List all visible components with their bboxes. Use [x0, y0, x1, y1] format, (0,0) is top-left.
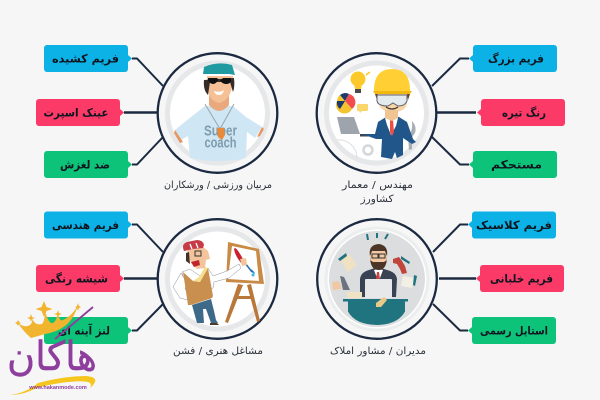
connectors: artist — [124, 224, 163, 330]
caption: engineers — [341, 180, 413, 205]
label: sport glasses — [36, 99, 124, 126]
circle: artist — [158, 219, 277, 339]
circle: manager — [317, 219, 437, 339]
label: mirrored lens: لنز آینه ای — [58, 324, 110, 338]
label: dark colour: رنگ تیره — [502, 106, 546, 120]
icon: coach figure: Super — [204, 122, 237, 140]
caption: engineers: کشاورز — [359, 194, 394, 205]
icon: crown — [18, 305, 78, 338]
caption: engineers: مهندس / معمار — [341, 180, 413, 191]
label: geometric frame — [44, 212, 132, 238]
label: coloured lens: شیشه رنگی — [45, 272, 108, 286]
icon: crown sparkles — [15, 301, 81, 326]
website address: www.hakanmode.com — [28, 385, 87, 391]
label: sturdy: مستحکم — [491, 158, 542, 172]
label: anti-slip — [44, 151, 132, 178]
panel: artist — [36, 212, 277, 357]
label: formal style — [468, 317, 556, 344]
label: classic frame: فریم کلاسیک — [476, 218, 552, 232]
icon: artist figure — [173, 240, 264, 325]
label: big frame: فریم بزرگ — [488, 52, 544, 66]
label: stretched frame: فریم کشیده — [52, 52, 119, 66]
circle: coach — [158, 53, 277, 173]
panel: manager — [317, 212, 564, 357]
label: aviator frame: فریم خلبانی — [490, 272, 553, 286]
label: aviator frame — [476, 265, 564, 292]
label: mirrored lens — [44, 317, 132, 344]
panel: sports coach — [36, 45, 277, 191]
label: coloured lens — [36, 265, 124, 292]
circle: engineer — [317, 53, 436, 173]
label: sturdy — [469, 151, 557, 178]
label: classic frame — [468, 212, 556, 238]
panel: engineer — [317, 45, 565, 205]
connectors: engineer — [432, 58, 476, 164]
connectors: manager — [433, 224, 476, 330]
label: stretched frame — [44, 45, 132, 72]
label: formal style: استایل رسمی — [480, 324, 548, 338]
stroke: kaf slash — [55, 307, 93, 339]
label: geometric frame: فریم هندسی — [52, 218, 119, 232]
label: sport glasses: عینک اسپرت — [44, 106, 108, 120]
icon: coach figure — [174, 63, 264, 161]
caption: artists: مشاغل هنری / فشن — [173, 346, 263, 357]
label: dark colour — [477, 99, 565, 126]
caption: coaches: مربیان ورزشی / ورشکاران — [164, 180, 272, 191]
label: anti-slip: ضد لغزش — [60, 158, 110, 172]
stroke: yellow swoosh — [10, 376, 95, 395]
caption: managers: مدیران / مشاور املاک — [330, 346, 426, 357]
icon: manager figure — [332, 233, 417, 325]
connectors: coach — [124, 58, 163, 164]
label: big frame — [469, 45, 557, 72]
brand name: هاکان — [7, 334, 97, 380]
icon: engineer figure — [336, 69, 416, 159]
icon: coach figure: coach — [204, 134, 236, 152]
logo: Hakan watermark — [7, 301, 97, 395]
